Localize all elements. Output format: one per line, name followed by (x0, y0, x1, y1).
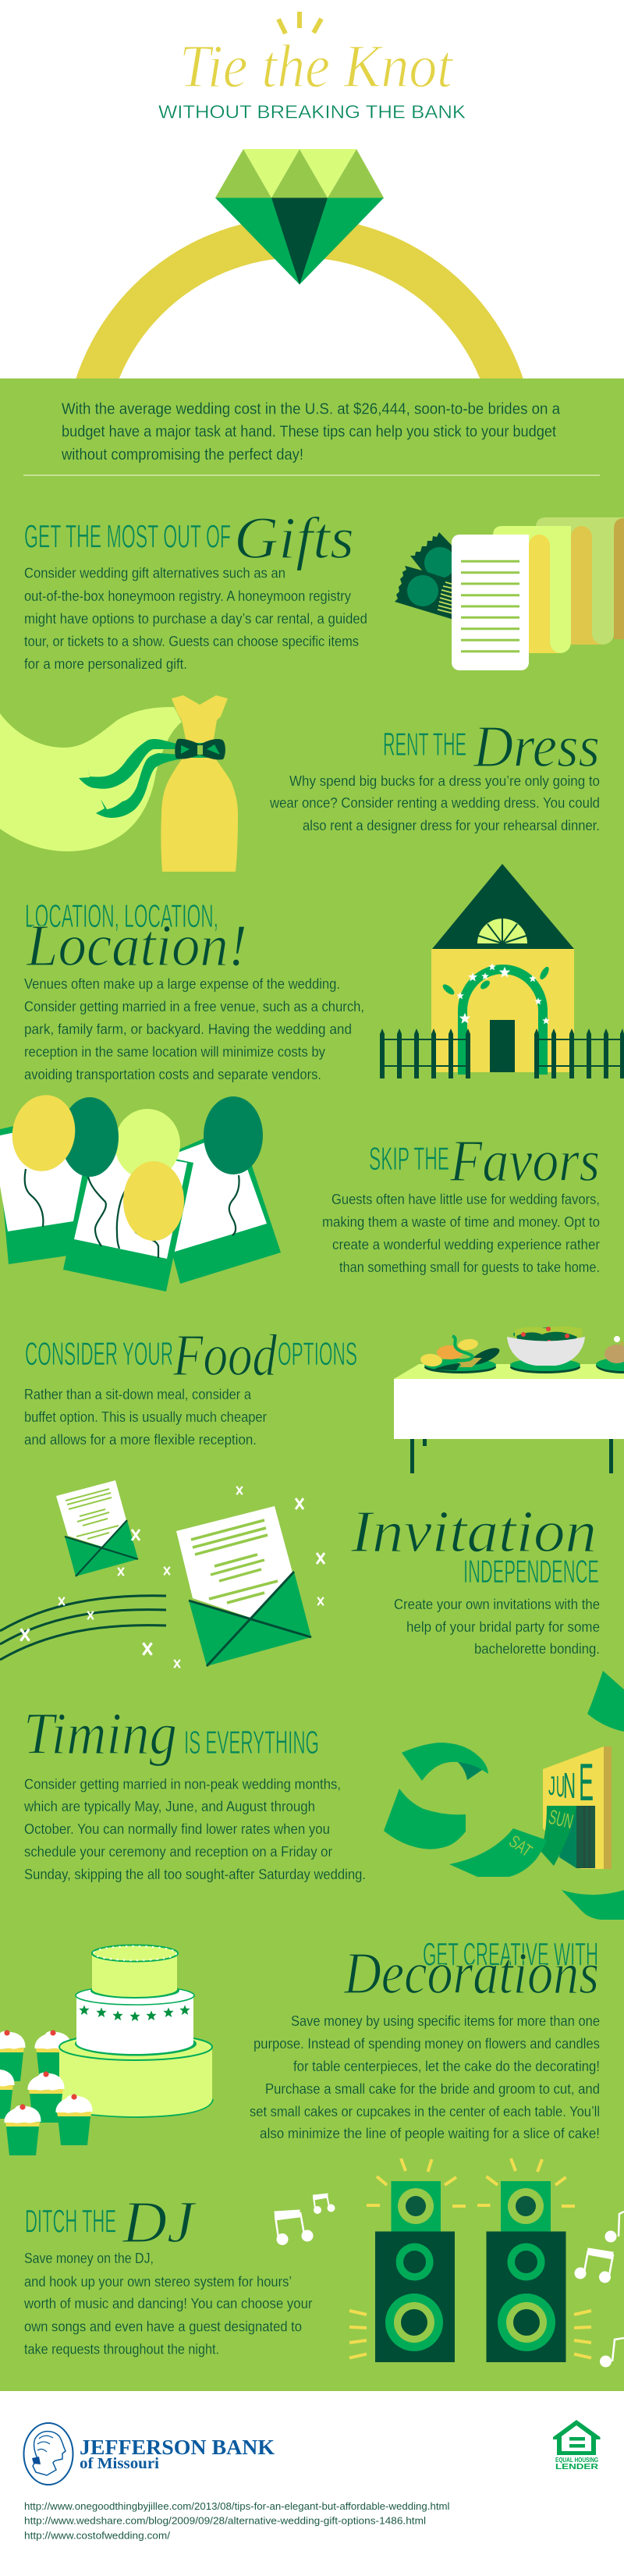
heading: location: Location! (26, 913, 247, 979)
panel: decorations (0, 1936, 600, 2155)
icon: salad bowl (507, 1327, 585, 1373)
label: June: U (556, 1771, 565, 1803)
text: DJ (23, 2250, 312, 2357)
text: timing: schedule your ceremony and reception on a Friday or (24, 1843, 332, 1860)
text: timing: Sunday, skipping the all too sought-after Saturday wedding. (24, 1866, 366, 1882)
text: gifts: out-of-the-box honeymoon registry. A honeymoon registry (24, 588, 352, 604)
sources: http://www.onegoodthingbyjillee.com/2013/08/tips-for-an-elegant-but-affordable-wedding.html (24, 2500, 450, 2512)
panel: food (24, 1323, 624, 1473)
icon: speakers (375, 2181, 566, 2362)
text: timing: which are typically May, June, and August through (23, 1798, 315, 1814)
icon: Jefferson portrait medallion (23, 2423, 73, 2485)
text: gifts: Consider wedding gift alternatives such as an (24, 565, 285, 581)
logo wordmark (80, 2436, 275, 2472)
icon: cupcakes front row (0, 2067, 93, 2155)
green background panel (0, 378, 624, 2391)
heading: DJ (25, 2190, 197, 2255)
heading: food: Food (172, 1323, 278, 1388)
heading: food: CONSIDER YOUR (25, 1335, 173, 1372)
panel: dress (0, 695, 600, 872)
text: decorations (250, 2013, 600, 2141)
text: favors: making them a waste of time and money. Opt to (322, 1213, 600, 1230)
text: invitation: Create your own invitations with the (394, 1596, 600, 1612)
text: food: and allows for a more flexible reception. (24, 1431, 257, 1448)
icon: tiered cake (59, 1945, 213, 2117)
icon: small envelope (56, 1480, 138, 1576)
heading: gifts: GET THE MOST OUT OF (24, 518, 231, 555)
text: food: buffet option. This is usually much cheaper (24, 1409, 267, 1425)
text: DJ: worth of music and dancing! You can choose your (23, 2295, 312, 2311)
text: food: Rather than a sit-down meal, consider a (24, 1386, 252, 1402)
text: location: avoiding transportation costs and separate vendors. (24, 1066, 321, 1082)
heading: gifts (24, 506, 354, 571)
heading: location: LOCATION, LOCATION, (25, 897, 218, 934)
label: Sun: SUN (547, 1805, 576, 1833)
heading: favors: SKIP THE (369, 1140, 449, 1177)
icon: large envelope (176, 1506, 311, 1666)
heading: gifts: Gifts (234, 506, 354, 571)
icon: chapel with arch and fence (380, 864, 624, 1078)
text: DJ: own songs and even have a guest designated to (24, 2318, 302, 2335)
icon: cash bills (395, 532, 456, 620)
text: timing (23, 1776, 366, 1882)
icon: equal housing lender: LENDER (555, 2463, 599, 2471)
icon: sound rays (349, 2159, 591, 2358)
icon: plate of corn (420, 1336, 502, 1373)
text: dress (269, 773, 600, 833)
panel: favors (0, 1090, 600, 1292)
icon: diamond (215, 149, 384, 285)
text: gifts: for a more personalized gift. (24, 656, 187, 672)
text: DJ: Save money on the DJ, (24, 2250, 154, 2266)
text: location (24, 975, 364, 1082)
icon: confetti crosses (20, 1487, 324, 1668)
icon: music notes (275, 2194, 624, 2367)
logo wordmark: of Missouri (80, 2455, 159, 2472)
intro text: without compromising the perfect day! (61, 446, 303, 464)
label: Sat: SAT (505, 1832, 536, 1860)
panel: DJ (23, 2159, 624, 2367)
heading: dress: Dress (473, 714, 600, 780)
text: invitation: help of your bridal party for some (406, 1618, 600, 1635)
icon: ring band (64, 217, 535, 688)
label: June: N (563, 1765, 576, 1806)
text: DJ: take requests throughout the night. (24, 2341, 219, 2357)
text: DJ: and hook up your own stereo system for hours’ (24, 2273, 292, 2290)
header: title and ring (64, 12, 535, 688)
panel: timing (23, 1671, 624, 1920)
intro text: With the average wedding cost in the U.S. at $26,444, soon-to-be brides on a (62, 400, 561, 418)
text: favors: create a wonderful wedding experience rather (332, 1236, 600, 1252)
heading: DJ: DITCH THE (25, 2203, 116, 2240)
text: gifts (24, 565, 367, 672)
heading: favors (369, 1128, 600, 1194)
text: gifts: tour, or tickets to a show. Guests can choose specific items (24, 633, 359, 649)
text: location: reception in the same location will minimize costs by (24, 1043, 326, 1060)
label: June (548, 1753, 594, 1812)
heading: invitation: Invitation (350, 1499, 597, 1565)
footer: bank logo (23, 2423, 275, 2485)
icon: flying calendar pages (384, 1671, 624, 1920)
text: location: Venues often make up a large expense of the wedding. (24, 975, 340, 992)
text: dress: Why spend big bucks for a dress you’re only going to (289, 773, 600, 789)
sources: http://www.wedshare.com/blog/2009/09/28/alternative-wedding-gift-options-1486.html (24, 2514, 426, 2527)
icon: buffet table (394, 1327, 624, 1473)
text: location: Consider getting married in a free venue, such as a church, (24, 998, 364, 1014)
heading: dress (383, 714, 600, 780)
icon: paper scrolls (452, 517, 624, 670)
label: June: J (548, 1771, 555, 1801)
panel: invitation (0, 1480, 600, 1668)
text: location: park, family farm, or backyard. Having the wedding and (24, 1021, 352, 1037)
heading: food: OPTIONS (278, 1335, 357, 1372)
sources: http://www.costofwedding.com/ (24, 2529, 170, 2541)
intro text (61, 400, 561, 464)
text: favors: Guests often have little use for wedding favors, (332, 1191, 600, 1207)
sources (24, 2500, 450, 2541)
icon: polaroids with balloons (0, 1090, 281, 1292)
text: dress: also rent a designer dress for your rehearsal dinner. (303, 817, 600, 833)
text: timing: Consider getting married in non-peak wedding months, (24, 1776, 341, 1792)
icon: equal housing lender (553, 2420, 601, 2471)
icon: wedding dress (0, 695, 238, 872)
text: favors (322, 1191, 600, 1275)
text: decorations: for table centerpieces, let the cake do the decorating! (293, 2058, 600, 2074)
panel: gifts (24, 506, 624, 672)
icon: sparkle rays (278, 12, 321, 34)
logo wordmark: JEFFERSON BANK (80, 2436, 275, 2459)
heading: timing: Timing (23, 1701, 177, 1767)
panel: location (24, 864, 624, 1082)
text: timing: October. You can normally find lower rates when you (24, 1821, 330, 1837)
text: gifts: might have options to purchase a day’s car rental, a guided (24, 610, 367, 627)
intro text: budget have a major task at hand. These tips can help you stick to your budget (62, 423, 556, 440)
subtitle: WITHOUT BREAKING THE BANK (158, 101, 466, 123)
heading: food (25, 1323, 357, 1388)
heading: invitation (350, 1499, 599, 1590)
text: food (24, 1386, 267, 1448)
icon: motion lines (0, 1596, 166, 1660)
heading: timing: IS EVERYTHING (184, 1724, 319, 1761)
text: dress: wear once? Consider renting a wedding dress. You could (269, 794, 600, 811)
icon: equal housing lender: EQUAL HOUSING (555, 2457, 598, 2464)
icon: cupcakes back row (0, 2030, 72, 2081)
heading: favors: Favors (449, 1128, 600, 1194)
heading: DJ: DJ (122, 2190, 197, 2255)
text: invitation (394, 1596, 600, 1657)
text: invitation: bachelorette bonding. (474, 1640, 600, 1657)
icon: plate with roast (596, 1336, 624, 1373)
icon: flying calendar pages: E (579, 1753, 594, 1812)
title: Tie the Knot (179, 32, 454, 100)
heading: dress: RENT THE (383, 726, 466, 762)
heading: timing (23, 1701, 319, 1767)
text: decorations: also minimize the line of people waiting for a slice of cake! (260, 2125, 600, 2141)
